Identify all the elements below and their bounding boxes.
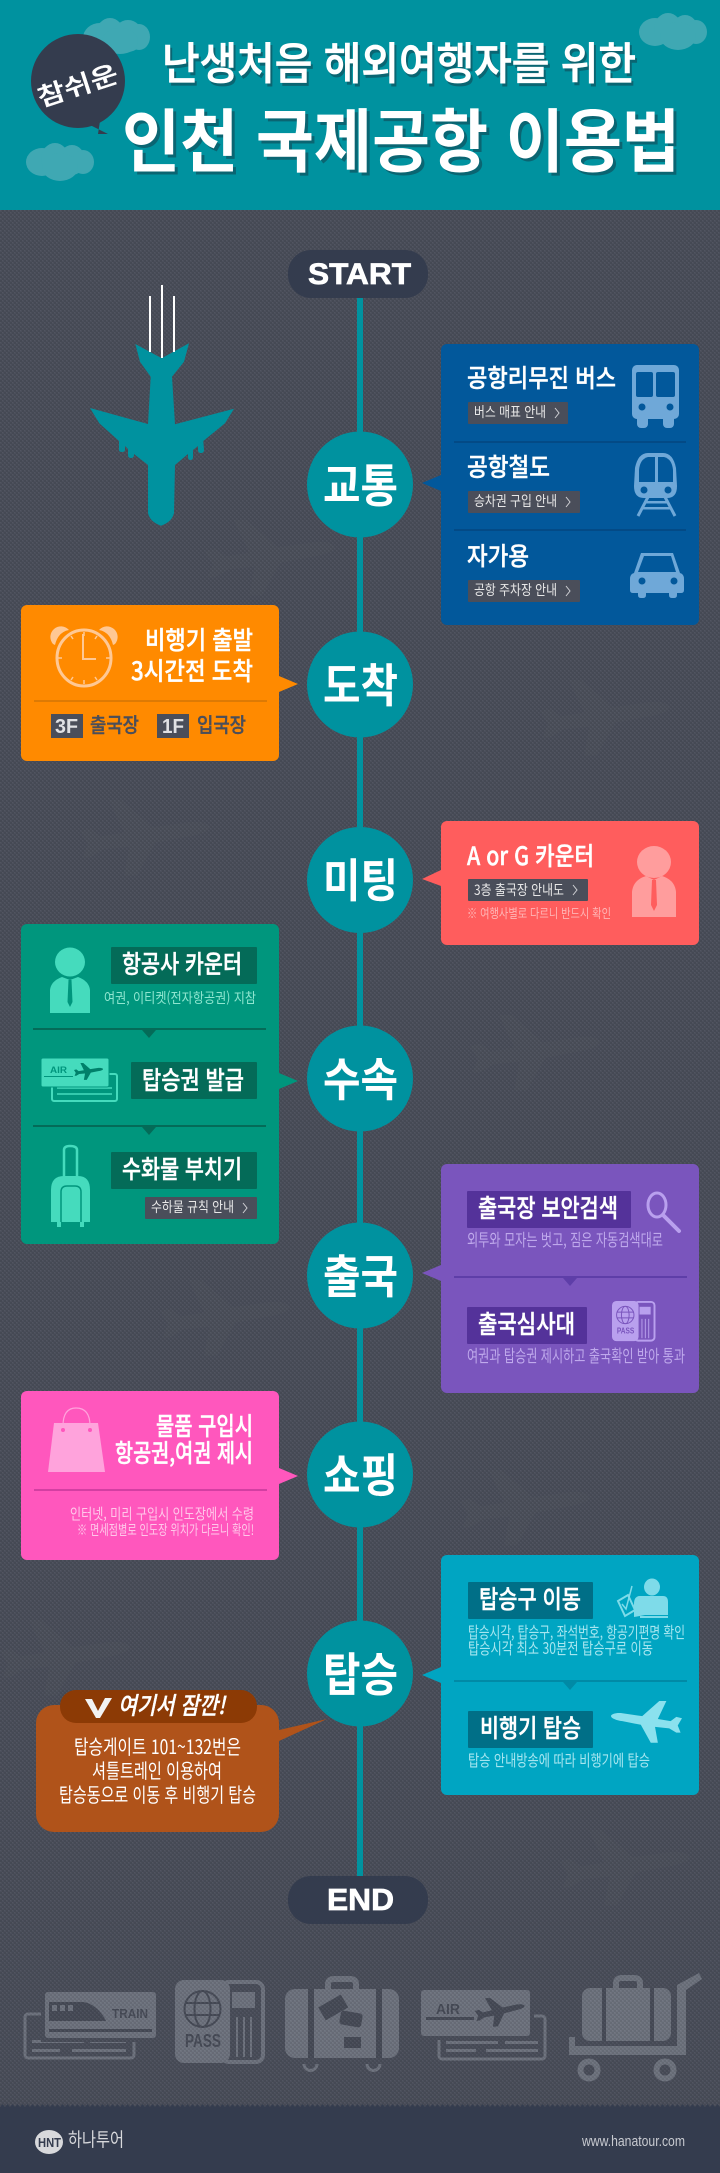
panel: boarding <box>422 1555 699 1795</box>
panel: check-in <box>21 924 298 1244</box>
start pill <box>288 250 428 298</box>
logo <box>35 2125 124 2154</box>
parking button: 공항 주차장 안내 <box>474 580 557 600</box>
callout body: 셔틀트레인 이용하여 <box>92 1755 222 1784</box>
icon: person checking <box>618 1578 668 1618</box>
icon: bus <box>632 365 679 428</box>
icon: passport <box>175 1980 263 2063</box>
counter heading: A or G 카운터 <box>467 837 594 873</box>
icon: passport: PASS <box>185 2031 221 2051</box>
step: 미팅: 미팅 <box>323 845 398 911</box>
icon: suitcase <box>285 1979 399 2071</box>
icon: air ticket: AIR <box>436 2001 460 2018</box>
callout body: 탑승게이트 101~132번은 <box>74 1731 241 1760</box>
gate notes <box>468 1619 685 1659</box>
step: 탑승: 탑승 <box>323 1639 398 1705</box>
icon: alarm clock <box>50 626 118 686</box>
meeting note: ※ 여행사별로 다르니 반드시 확인 <box>467 903 611 922</box>
icon: train ticket: TRAIN <box>112 2006 148 2021</box>
immigration heading: 출국심사대 <box>478 1305 575 1341</box>
divider arrow 1 <box>33 1028 266 1038</box>
icon: boarding pass: AIR <box>50 1065 68 1075</box>
step: 교통: 교통 <box>323 450 398 516</box>
shopping notes: ※ 면세점별로 인도장 위치가 다르니 확인! <box>77 1520 254 1540</box>
gate heading: 탑승구 이동 <box>479 1580 581 1616</box>
arrivals floor <box>157 709 246 738</box>
panel: departure <box>422 1164 699 1393</box>
arrival heading <box>131 621 253 688</box>
gate notes: 탑승시각 최소 30분전 탑승구로 이동 <box>468 1635 653 1659</box>
departures floor: 3F <box>55 716 78 738</box>
icon: person <box>50 948 90 1013</box>
airport limousine heading: 공항리무진 버스 <box>467 359 616 395</box>
airline counter heading: 항공사 카운터 <box>122 945 242 981</box>
step: 수속: 수속 <box>323 1044 398 1110</box>
panel: transport <box>422 344 699 625</box>
step: 탑승 <box>307 1620 413 1726</box>
start pill: START <box>308 258 411 291</box>
panel: arrival <box>21 605 298 761</box>
faint background planes <box>0 520 690 1905</box>
panel: shopping <box>21 1391 298 1560</box>
end pill: END <box>327 1882 394 1917</box>
boarding note: 탑승 안내방송에 따라 비행기에 탑승 <box>468 1747 650 1771</box>
icon: boarding pass <box>41 1058 117 1101</box>
rail heading: 공항철도 <box>467 448 550 484</box>
icon: luggage <box>51 1146 90 1227</box>
baggage heading: 수화물 부치기 <box>122 1150 242 1186</box>
title line 2: 인천 국제공항 이용법 <box>122 86 680 186</box>
cloud top right <box>639 13 707 50</box>
shopping heading: 항공권,여권 제시 <box>115 1434 253 1470</box>
speech bubble badge <box>31 34 125 134</box>
step: 미팅 <box>307 827 413 933</box>
icon: air ticket <box>417 1986 545 2059</box>
boarding heading: 비행기 탑승 <box>480 1709 581 1745</box>
shopping heading: 물품 구입시 <box>156 1407 253 1443</box>
departures floor <box>51 709 139 738</box>
boarding pass heading: 탑승권 발급 <box>142 1061 244 1097</box>
footer <box>0 2104 720 2173</box>
check-in note: 여권, 이티켓(전자항공권) 지참 <box>104 988 256 1008</box>
logo: HNT <box>38 2135 61 2150</box>
icon: airplane <box>611 1701 682 1743</box>
bottom icons row <box>25 1973 702 2078</box>
end pill <box>288 1876 428 1924</box>
divider arrow 2 <box>33 1125 266 1135</box>
logo: 하나투어 <box>68 2125 124 2152</box>
shopping heading <box>115 1407 253 1470</box>
step: 출국: 출국 <box>323 1241 398 1307</box>
website: www.hanatour.com <box>581 2133 685 2150</box>
arrivals floor: 입국장 <box>197 709 246 738</box>
speech bubble badge: 참쉬운 <box>32 55 122 115</box>
divider arrow <box>454 1680 687 1690</box>
icon: passport: PASS <box>617 1325 634 1335</box>
arrival heading: 3시간전 도착 <box>131 652 253 688</box>
arrival heading: 비행기 출발 <box>145 621 253 657</box>
bus ticket button: 버스 매표 안내 <box>474 402 546 422</box>
cloud lower left <box>26 143 94 181</box>
step: 출국 <box>307 1222 413 1328</box>
icon: train <box>634 453 677 516</box>
security heading: 출국장 보안검색 <box>478 1189 618 1225</box>
title line 1: 난생처음 해외여행자를 위한 <box>162 28 636 92</box>
icon: luggage cart <box>569 1973 702 2078</box>
callout body: 탑승동으로 이동 후 비행기 탑승 <box>59 1779 256 1808</box>
private car heading: 자가용 <box>467 537 529 573</box>
shopping notes: 인터넷, 미리 구입시 인도장에서 수령 <box>70 1503 254 1524</box>
step: 도착 <box>307 632 413 738</box>
cloud top left <box>83 18 150 54</box>
icon: passport <box>612 1301 655 1341</box>
shopping notes <box>70 1503 254 1540</box>
icon: magnifier <box>648 1193 679 1231</box>
callout header pill <box>60 1686 257 1723</box>
arrivals floor: 1F <box>162 716 184 738</box>
airplane illustration <box>90 285 234 526</box>
callout header pill: 여기서 잠깐! <box>118 1686 227 1721</box>
timeline line <box>357 296 363 1878</box>
icon: car <box>630 553 684 598</box>
baggage rule button: 수하물 규칙 안내 <box>151 1197 234 1217</box>
step: 수속 <box>307 1026 413 1132</box>
rail ticket button: 승차권 구입 안내 <box>474 491 557 511</box>
step: 교통 <box>307 432 413 538</box>
departures floor: 출국장 <box>90 709 139 738</box>
header band <box>0 0 720 210</box>
callout: wait here <box>36 1686 327 1832</box>
callout body <box>59 1731 256 1808</box>
step: 도착: 도착 <box>323 650 398 716</box>
icon: person <box>632 846 676 917</box>
icon: train ticket <box>25 1988 160 2058</box>
panel: meeting <box>422 821 699 945</box>
step: 쇼핑 <box>307 1422 413 1528</box>
step: 쇼핑: 쇼핑 <box>323 1440 398 1506</box>
icon: shopping bag <box>48 1408 105 1472</box>
divider arrow <box>454 1276 687 1286</box>
floor map button: 3층 출국장 안내도 <box>474 880 564 900</box>
